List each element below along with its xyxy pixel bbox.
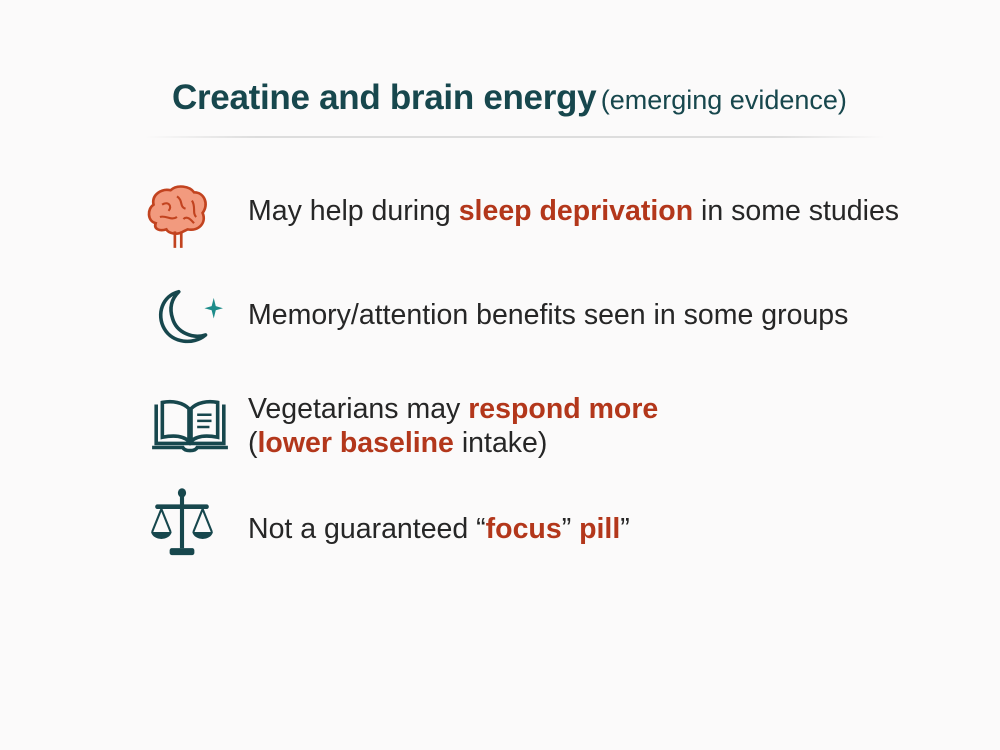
- text: sleep deprivation: May help during sleep deprivation in some studies: [248, 195, 899, 227]
- text: memory: Memory/attention benefits seen in some groups: [248, 299, 848, 331]
- icon: book: [152, 400, 228, 452]
- icon: brain: [148, 185, 207, 248]
- icon: scales: [151, 488, 213, 556]
- text: vegetarians: Vegetarians may respond more: [248, 393, 658, 425]
- icon: moon: [158, 290, 223, 344]
- text: vegetarians: [248, 393, 658, 459]
- text: not a pill: Not a guaranteed “focus” pill”: [248, 513, 630, 545]
- title: Creatine and brain energy (emerging evidence): [172, 78, 847, 117]
- text: vegetarians: (lower baseline intake): [248, 427, 547, 459]
